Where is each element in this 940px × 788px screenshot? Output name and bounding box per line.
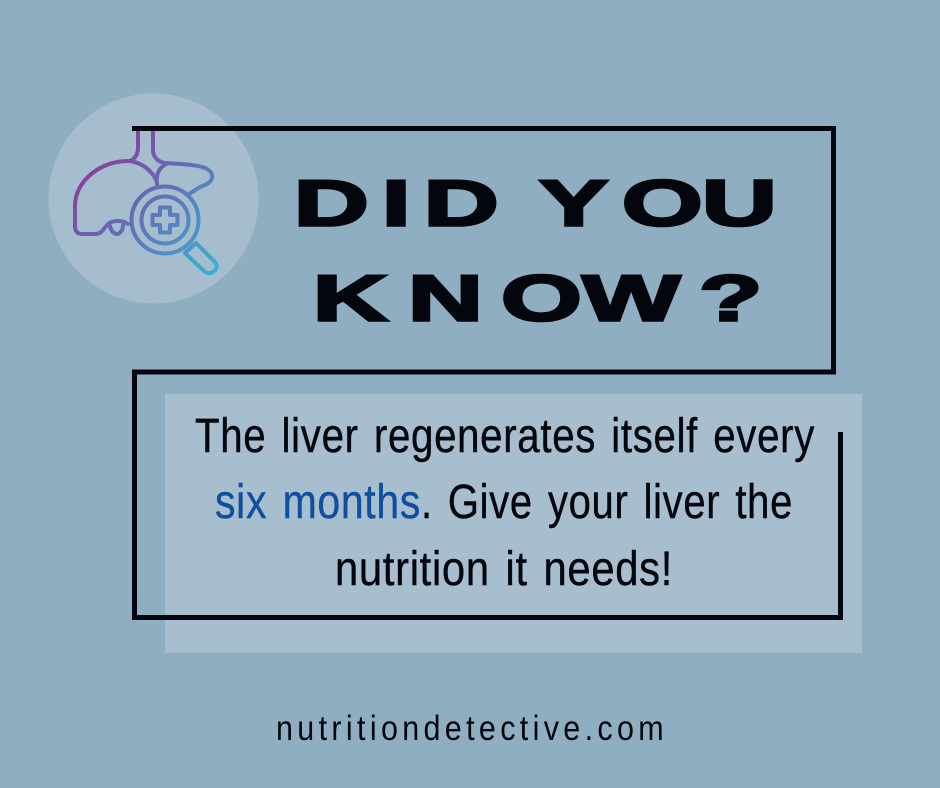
- title: [294, 167, 777, 335]
- body text: . Give your liver the: [421, 476, 793, 529]
- website footer: nutritiondetective.com: [276, 709, 668, 748]
- body text: The liver regenerates itself every: [195, 410, 815, 463]
- top title frame: [132, 128, 834, 372]
- icon badge circle: [48, 94, 258, 304]
- body text: [195, 410, 815, 596]
- text panel: [165, 394, 862, 653]
- body text: six months: [215, 476, 421, 529]
- icon: liver with magnifying glass: [75, 130, 217, 273]
- body text: nutrition it needs!: [335, 543, 673, 596]
- title: KNOW?: [313, 262, 762, 335]
- title: DIDYOU: [294, 167, 777, 240]
- lower frame: [134, 372, 840, 618]
